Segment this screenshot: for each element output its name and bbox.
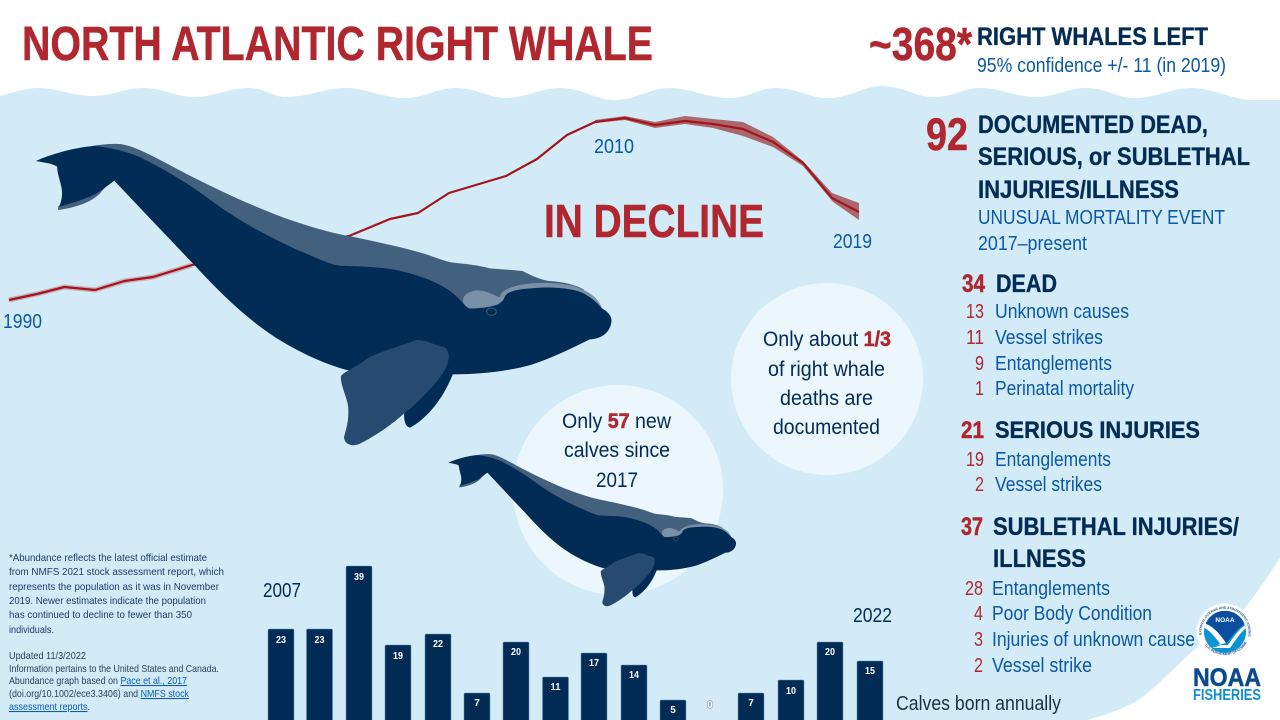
- panel: dead breakdown: 9: [975, 353, 984, 375]
- callout: new calves: [513, 385, 723, 595]
- title: NORTH ATLANTIC RIGHT WHALE: [22, 18, 653, 71]
- calves bar chart: 15: [865, 666, 875, 677]
- calves bar chart: 22: [433, 639, 443, 650]
- panel: serious injuries breakdown: 2: [975, 474, 984, 496]
- icon: NOAA Fisheries logo: NOAA: [1215, 617, 1235, 624]
- population line: [9, 118, 859, 300]
- footnote: (doi.org/10.1002/ece3.3406) and NMFS stock: [9, 688, 190, 700]
- panel: sublethal injuries breakdown: Vessel strike: [992, 655, 1092, 677]
- callout: one third of deaths documented: documented: [773, 416, 880, 439]
- panel: sublethal injuries breakdown: [961, 513, 1239, 677]
- icon: NOAA Fisheries logo: NATIONAL OCEANIC AND ATMOSPHERIC ADMINISTRATION: [1199, 606, 1251, 636]
- calves bar chart: 20: [825, 647, 835, 658]
- panel: documented cases summary: [926, 109, 1250, 255]
- population count block: [869, 18, 1226, 77]
- panel: dead breakdown: 13: [966, 301, 984, 323]
- callout: new calves: Only 57 new: [562, 410, 672, 433]
- calves bar chart: 10: [786, 686, 796, 697]
- Fisheries wordmark: FISHERIES: [1193, 687, 1261, 704]
- calves bar chart: 7: [474, 698, 480, 709]
- panel: serious injuries breakdown: 21: [961, 417, 984, 444]
- panel: dead breakdown: Vessel strikes: [995, 327, 1103, 349]
- panel: sublethal injuries breakdown: Entanglements: [992, 578, 1110, 600]
- calves bar chart: 23: [314, 635, 325, 646]
- panel: sublethal injuries breakdown: ILLNESS: [993, 545, 1086, 573]
- panel: sublethal injuries breakdown: Poor Body Condition: [992, 603, 1152, 625]
- footnote: individuals.: [9, 624, 54, 636]
- panel: serious injuries breakdown: 19: [966, 449, 984, 471]
- callout: new calves: calves since: [564, 439, 670, 462]
- footnote: Updated 11/3/2022: [9, 650, 86, 662]
- footnote: 2019. Newer estimates indicate the population: [9, 595, 206, 607]
- calves bar chart: 7: [748, 698, 754, 709]
- panel: sublethal injuries breakdown: 4: [974, 603, 983, 625]
- panel: documented cases summary: INJURIES/ILLNESS: [978, 176, 1179, 204]
- callout: one third of deaths documented: Only about 1/3: [763, 328, 891, 351]
- footnote: assessment reports.: [9, 701, 90, 713]
- calves bar chart: 19: [393, 651, 403, 662]
- footnote: Abundance graph based on Pace et al., 2017: [9, 675, 187, 687]
- panel: serious injuries breakdown: Vessel strikes: [995, 474, 1102, 496]
- panel: dead breakdown: 34: [962, 270, 985, 298]
- in decline heading: IN DECLINE: [544, 195, 764, 247]
- panel: sublethal injuries breakdown: 37: [961, 513, 983, 541]
- panel: sublethal injuries breakdown: 28: [965, 578, 983, 600]
- footnote: represents the population as it was in November: [9, 581, 219, 593]
- panel: sublethal injuries breakdown: 3: [974, 629, 983, 651]
- footnote: has continued to decline to fewer than 350: [9, 609, 192, 621]
- population number: ~368*: [869, 18, 972, 70]
- calves bar chart: [263, 566, 1061, 720]
- panel: dead breakdown: 1: [975, 378, 984, 400]
- calves bar chart: 23: [276, 635, 286, 646]
- year 2022: 2022: [853, 605, 892, 627]
- calves bar chart: 11: [550, 682, 561, 693]
- NOAA wordmark: NOAA: [1193, 664, 1261, 692]
- footnote: Information pertains to the United States and Canada.: [9, 663, 219, 675]
- footnote: [9, 552, 224, 713]
- panel: sublethal injuries breakdown: Injuries of unknown cause: [992, 629, 1195, 651]
- population line chart: [3, 116, 872, 333]
- year 2019: 2019: [833, 231, 872, 253]
- panel: dead breakdown: 11: [966, 327, 984, 349]
- year 2010: 2010: [594, 136, 634, 158]
- small calf whale illustration: [448, 454, 736, 606]
- panel: sublethal injuries breakdown: SUBLETHAL INJURIES/: [993, 513, 1239, 541]
- panel: sublethal injuries breakdown: 2: [974, 655, 983, 677]
- large whale illustration: [36, 144, 612, 445]
- calves bar chart: 17: [589, 658, 599, 669]
- panel: serious injuries breakdown: Entanglements: [995, 449, 1111, 471]
- calves bar chart: 0: [707, 700, 713, 711]
- panel: documented cases summary: SERIOUS, or SUBLETHAL: [978, 143, 1250, 171]
- total number: 92: [926, 109, 968, 160]
- calves bar chart: 20: [511, 647, 521, 658]
- panel: dead breakdown: Entanglements: [995, 353, 1112, 375]
- calves bar chart: 5: [670, 705, 676, 716]
- panel: dead breakdown: [962, 270, 1134, 400]
- confidence note: 95% confidence +/- 11 (in 2019): [977, 55, 1226, 77]
- panel: documented cases summary: 2017–present: [978, 233, 1087, 255]
- calves bar chart: 14: [629, 670, 639, 681]
- callout: one third of deaths documented: deaths are: [780, 387, 873, 410]
- icon: NOAA Fisheries logo: U.S. DEPARTMENT OF COMMERCE: [1206, 641, 1247, 656]
- unusual mortality event note: UNUSUAL MORTALITY EVENT: [978, 207, 1225, 229]
- panel: serious injuries breakdown: SERIOUS INJURIES: [995, 417, 1200, 444]
- callout: new calves: 2017: [596, 469, 638, 492]
- year 1990: 1990: [3, 311, 42, 333]
- footnote: from NMFS 2021 stock assessment report, which: [9, 566, 224, 578]
- confidence band: [595, 116, 859, 220]
- panel: dead breakdown: Unknown causes: [995, 301, 1129, 323]
- chart caption: Calves born annually: [896, 693, 1061, 715]
- summary heading: DOCUMENTED DEAD,: [978, 111, 1208, 139]
- panel: dead breakdown: Perinatal mortality: [995, 378, 1134, 400]
- early band: [9, 265, 192, 300]
- year 2007: 2007: [263, 580, 301, 602]
- population label: RIGHT WHALES LEFT: [977, 23, 1208, 51]
- callout: one third of deaths documented: of right whale: [768, 358, 885, 381]
- panel: dead breakdown: DEAD: [996, 270, 1057, 298]
- calves bar chart: 39: [354, 572, 364, 583]
- callout: one third of deaths documented: [731, 283, 923, 475]
- panel: serious injuries breakdown: [961, 417, 1200, 496]
- footnote: *Abundance reflects the latest official estimate: [9, 552, 207, 564]
